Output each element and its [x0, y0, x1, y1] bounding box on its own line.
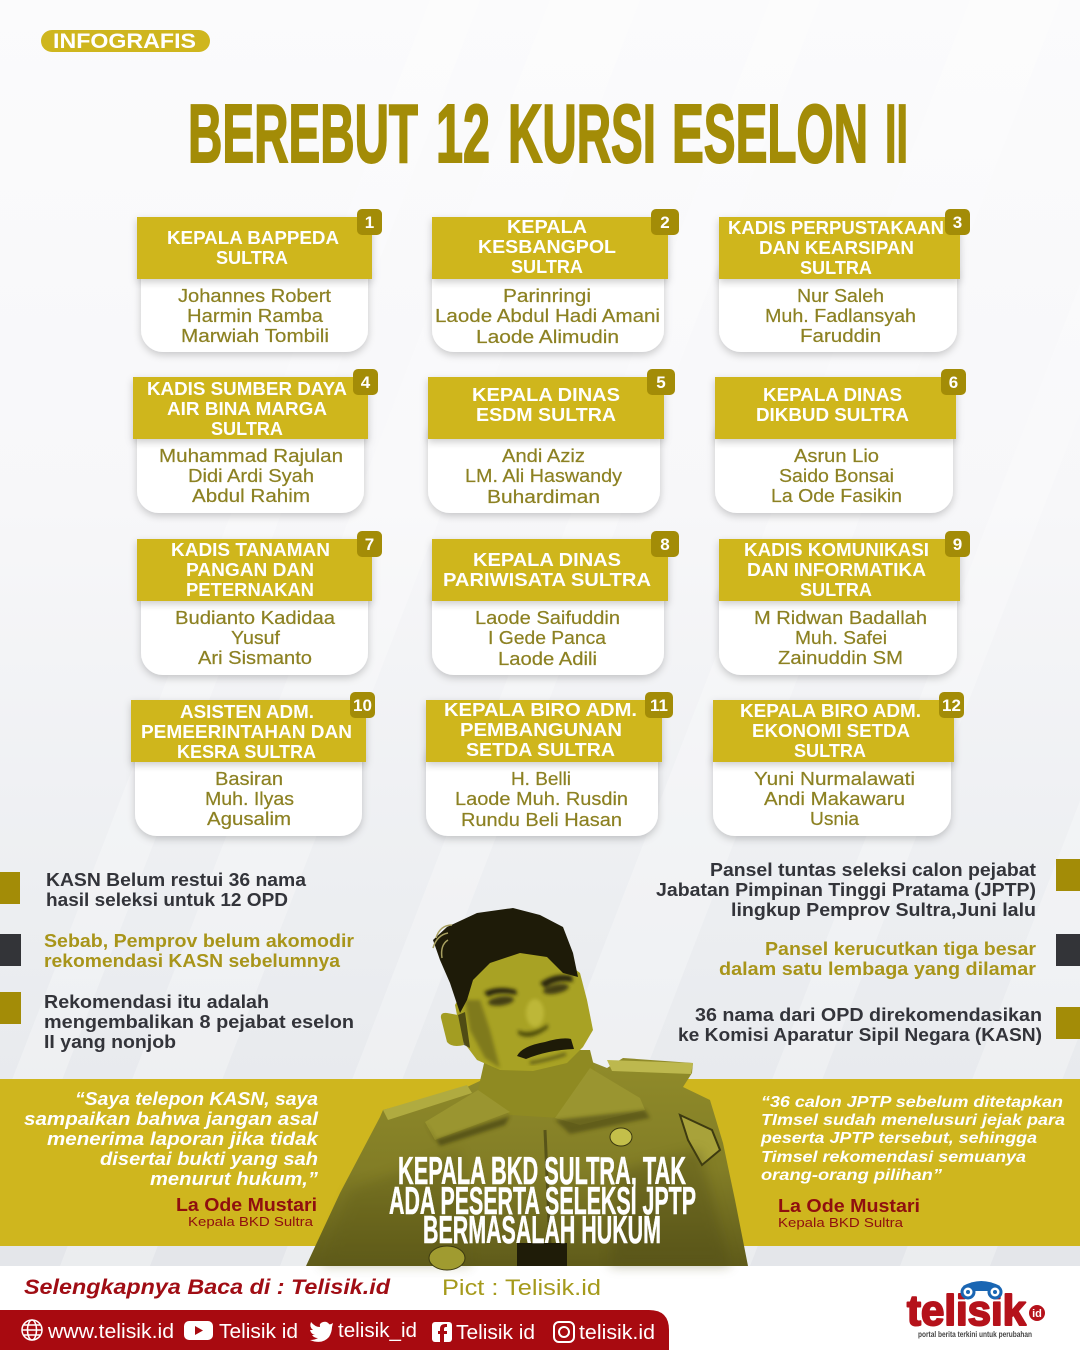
photo credit: Pict : Telisik.id [442, 1275, 601, 1300]
card 10 names [205, 769, 294, 829]
right quote: peserta JPTP tersebut, sehingga [760, 1130, 1037, 1147]
logo wordmark: telisik [907, 1287, 1026, 1335]
head [455, 950, 593, 1071]
card 11 header: SETDA SULTRA [466, 740, 615, 760]
right fact 1: Pansel tuntas seleksi calon pejabat [710, 860, 1036, 880]
left quote: menerima laporan jika tidak [47, 1129, 319, 1149]
card 2 header: SULTRA [511, 257, 583, 277]
card 1 names: Harmin Ramba [187, 306, 324, 326]
card 1 header: KEPALA BAPPEDA [167, 228, 339, 248]
card 11 names: Laode Muh. Rusdin [455, 789, 628, 809]
card 2 header [432, 217, 668, 279]
left quote: sampaikan bahwa jangan asal [24, 1109, 319, 1129]
card 10 header: KESRA SULTRA [177, 742, 316, 762]
card 11: Kepala Biro Adm. Pembangunan Setda Sultra [426, 692, 673, 836]
logo id circle: id [1032, 1308, 1042, 1320]
card 4 header: AIR BINA MARGA [167, 399, 327, 419]
card 4 names: Muhammad Rajulan [159, 446, 343, 466]
card 7 header [137, 539, 372, 601]
card 2 names: Parinringi [503, 286, 591, 306]
logo: telisik.id [907, 1281, 1045, 1339]
card 12 names: Usnia [810, 809, 860, 829]
card 12 header: EKONOMI SETDA [752, 721, 910, 741]
card 4: Kadis Sumber Daya Air Bina Marga Sultra [133, 369, 378, 513]
right quote: Kepala BKD Sultra [778, 1215, 904, 1230]
card 1 number badge [357, 209, 382, 235]
card 3 names: Muh. Fadlansyah [765, 306, 916, 326]
card 4 names [159, 446, 343, 506]
card 10 header: PEMEERINTAHAN DAN [141, 722, 352, 742]
card 2 names: Laode Alimudin [476, 327, 619, 347]
card 11 header: PEMBANGUNAN [460, 720, 622, 740]
card 8 number badge [651, 531, 679, 557]
left quote [24, 1089, 319, 1229]
card 9 header [719, 539, 960, 601]
card 2 names: Laode Abdul Hadi Amani [435, 306, 660, 326]
right fact 1: lingkup Pemprov Sultra,Juni lalu [731, 900, 1036, 920]
card 8 names [475, 608, 620, 669]
card 12 names: Yuni Nurmalawati [754, 769, 915, 789]
left fact 3: II yang nonjob [44, 1032, 176, 1052]
card 12 names: Andi Makawaru [764, 789, 905, 809]
card 12 header [713, 700, 954, 762]
logo binoculars [960, 1281, 1002, 1300]
card 11 names: H. Belli [511, 769, 571, 789]
card 4 header: SULTRA [211, 419, 283, 439]
right fact 3 [678, 1005, 1080, 1045]
card 6 header: DIKBUD SULTRA [756, 405, 909, 425]
card 2 header: KESBANGPOL [478, 237, 616, 257]
card 7 number badge: 7 [365, 535, 374, 554]
left fact 2: Sebab, Pemprov belum akomodir [44, 931, 354, 951]
card 10 names: Basiran [215, 769, 283, 789]
card 8 names: Laode Adili [498, 649, 597, 669]
card 3 names: Faruddin [800, 326, 881, 346]
card 3 header [719, 217, 960, 279]
title: KURSI [508, 87, 656, 180]
card 9 names: M Ridwan Badallah [754, 608, 927, 628]
card 2: Kepala Kesbangpol Sultra [432, 209, 679, 352]
right fact 1: Jabatan Pimpinan Tinggi Pratama (JPTP) [656, 880, 1036, 900]
right fact 1 [656, 859, 1080, 920]
right fact 2: dalam satu lembaga yang dilamar [719, 959, 1036, 979]
card 6 names: La Ode Fasikin [771, 486, 902, 506]
card 1 names: Marwiah Tombili [181, 326, 329, 346]
card 12 number badge: 12 [942, 696, 961, 715]
youtube name: Telisik id [219, 1321, 298, 1343]
card 7 names [175, 608, 336, 668]
card 7 names: Budianto Kadidaa [175, 608, 336, 628]
card 10: Asisten Adm. Pemerintahan dan Kesra Sultra [131, 692, 375, 836]
card 11 number badge [645, 692, 673, 718]
title: BEREBUT [188, 87, 418, 180]
left fact 3: Rekomendasi itu adalah [44, 992, 269, 1012]
card 10 header: ASISTEN ADM. [180, 702, 314, 722]
card 8 names: I Gede Panca [488, 628, 607, 648]
title [188, 87, 908, 180]
quote band [0, 1079, 1080, 1246]
right fact 2 [719, 934, 1080, 979]
card 4 header [133, 377, 368, 439]
left quote: “Saya telepon KASN, saya [75, 1089, 318, 1109]
card 8 header: KEPALA DINAS [473, 550, 621, 570]
right fact 3: 36 nama dari OPD direkomendasikan [695, 1005, 1042, 1025]
card 3 header: DAN KEARSIPAN [759, 238, 914, 258]
card 8: Kepala Dinas Pariwisata Sultra [432, 531, 679, 675]
left quote: La Ode Mustari [176, 1195, 317, 1215]
card 1 names [178, 286, 331, 346]
left fact 1 [0, 870, 307, 910]
card 8 header [432, 539, 668, 601]
card 9 names: Muh. Safei [795, 628, 887, 648]
card 11 names [455, 769, 628, 830]
card 6 names: Saido Bonsai [779, 466, 894, 486]
card 7 number badge [357, 531, 382, 557]
card 1 names: Johannes Robert [178, 286, 331, 306]
title: 12 [436, 87, 490, 180]
card 6 names [771, 446, 902, 506]
card 3 header: SULTRA [800, 258, 872, 278]
card 3 number badge [945, 209, 970, 235]
card 9: Kadis Komunikasi dan Informatika Sultra [719, 531, 970, 675]
card 12: Kepala Biro Adm. Ekonomi Setda Sultra [713, 692, 964, 836]
logo tagline: portal berita terkini untuk perubahan [918, 1330, 1032, 1339]
card 1 header [137, 217, 372, 279]
card 5: Kepala Dinas ESDM Sultra [428, 369, 675, 513]
card 1 number badge: 1 [365, 213, 374, 232]
card 1: Kepala Bappeda Sultra [137, 209, 382, 352]
card 3: Kadis Perpustakaan dan Kearsipan Sultra [719, 209, 970, 352]
card 6 header [715, 377, 956, 439]
icon: twitter [310, 1322, 333, 1342]
card 5 names: Andi Aziz [502, 446, 585, 466]
left quote: disertai bukti yang sah [100, 1149, 318, 1169]
card 1 header: SULTRA [216, 248, 288, 268]
card 9 names: Zainuddin SM [778, 648, 903, 668]
card 9 number badge [945, 531, 970, 557]
card 10 number badge [350, 692, 375, 718]
card 9 header: DAN INFORMATIKA [747, 560, 926, 580]
right quote: La Ode Mustari [778, 1196, 920, 1216]
card 12 header: SULTRA [794, 741, 866, 761]
card 11 header [426, 700, 662, 762]
left fact 3: mengembalikan 8 pejabat eselon [44, 1012, 354, 1032]
card 5 names [465, 446, 622, 507]
card 12 number badge [939, 692, 964, 718]
card 5 names: LM. Ali Haswandy [465, 466, 622, 486]
card 5 number badge [647, 369, 675, 395]
social bar [0, 1310, 669, 1350]
card 4 number badge: 4 [361, 373, 371, 392]
twitter name: telisik_id [338, 1320, 417, 1342]
card 7 header: PANGAN DAN [186, 560, 314, 580]
right quote: TImsel sudah menelusuri jejak para [761, 1112, 1065, 1129]
card 8 number badge: 8 [660, 535, 670, 554]
card 8 names: Laode Saifuddin [475, 608, 620, 628]
card 9 header: KADIS KOMUNIKASI [744, 540, 929, 560]
card 5 header: ESDM SULTRA [476, 405, 616, 425]
card 5 header [428, 377, 664, 439]
title: ESELON [672, 87, 868, 180]
card 6 number badge: 6 [949, 373, 958, 392]
card 11 header: KEPALA BIRO ADM. [444, 700, 637, 720]
icon: instagram [554, 1322, 574, 1342]
card 6 number badge [941, 369, 966, 395]
icon: facebook [432, 1322, 452, 1342]
card 3 header: KADIS PERPUSTAKAAN [728, 218, 944, 238]
card 6 header: KEPALA DINAS [763, 385, 902, 405]
card 7: Kadis Tanaman Pangan dan Peternakan [137, 531, 382, 675]
card 5 header: KEPALA DINAS [472, 385, 620, 405]
card 9 number badge: 9 [953, 535, 962, 554]
card 7 names: Ari Sismanto [198, 648, 312, 668]
card 11 number badge: 11 [650, 696, 668, 715]
card 7 header: PETERNAKAN [186, 580, 314, 600]
card 4 number badge [353, 369, 378, 395]
portrait caption [389, 1150, 696, 1252]
left quote: menurut hukum,” [150, 1169, 318, 1189]
card 6: Kepala Dinas Dikbud Sultra [715, 369, 966, 513]
facebook name: Telisik id [456, 1322, 535, 1344]
card 5 number badge: 5 [656, 373, 666, 392]
right fact 3: ke Komisi Aparatur Sipil Negara (KASN) [678, 1025, 1042, 1045]
card 12 header: KEPALA BIRO ADM. [740, 701, 921, 721]
portrait caption: KEPALA BKD SULTRA, TAK [398, 1150, 686, 1193]
card 10 number badge: 10 [353, 696, 372, 715]
icon: youtube [184, 1321, 213, 1340]
card 10 names: Agusalim [207, 809, 291, 829]
tag: infografis: INFOGRAFIS [53, 30, 196, 53]
card 12 names [754, 769, 915, 829]
right fact 2: Pansel kerucutkan tiga besar [765, 939, 1036, 959]
card 7 names: Yusuf [231, 628, 281, 648]
card 10 header [131, 700, 366, 762]
left fact 1: hasil seleksi untuk 12 OPD [46, 890, 288, 910]
card 11 names: Rundu Beli Hasan [461, 810, 622, 830]
right quote: “36 calon JPTP sebelum ditetapkan [761, 1094, 1063, 1111]
card 2 names [435, 286, 660, 347]
read more line: Selengkapnya Baca di : Telisik.id [24, 1276, 391, 1299]
card 2 header: KEPALA [507, 217, 587, 237]
card 4 names: Abdul Rahim [192, 486, 310, 506]
right quote: Timsel rekomendasi semuanya [761, 1149, 1026, 1166]
card 9 names [754, 608, 927, 668]
card 6 names: Asrun Lio [794, 446, 879, 466]
text: II [885, 87, 908, 180]
card 10 names: Muh. Ilyas [205, 789, 294, 809]
portrait caption: BERMASALAH HUKUM [423, 1209, 661, 1252]
left quote: Kepala BKD Sultra [188, 1214, 314, 1229]
card 4 names: Didi Ardi Syah [188, 466, 314, 486]
left fact 2: rekomendasi KASN sebelumnya [44, 951, 341, 971]
card 3 names: Nur Saleh [797, 286, 884, 306]
right quote: orang-orang pilihan” [761, 1167, 942, 1184]
icon: globe [22, 1320, 42, 1340]
right quote [760, 1094, 1065, 1230]
instagram name: telisik.id [579, 1322, 655, 1344]
left fact 2 [0, 931, 354, 971]
card 3 names [765, 286, 916, 346]
card 5 names: Buhardiman [487, 487, 600, 507]
website: www.telisik.id [47, 1321, 174, 1343]
card 3 number badge: 3 [953, 213, 962, 232]
card 7 header: KADIS TANAMAN [171, 540, 330, 560]
card 9 header: SULTRA [800, 580, 872, 600]
left fact 1: KASN Belum restui 36 nama [46, 870, 307, 890]
portrait caption: ADA PESERTA SELEKSI JPTP [389, 1180, 696, 1223]
card 8 header: PARIWISATA SULTRA [443, 570, 651, 590]
card 2 number badge [651, 209, 679, 235]
card 4 header: KADIS SUMBER DAYA [147, 379, 347, 399]
left fact 3 [0, 992, 354, 1052]
card 2 number badge: 2 [660, 213, 670, 232]
portrait: official in uniform, olive duotone [306, 908, 748, 1270]
